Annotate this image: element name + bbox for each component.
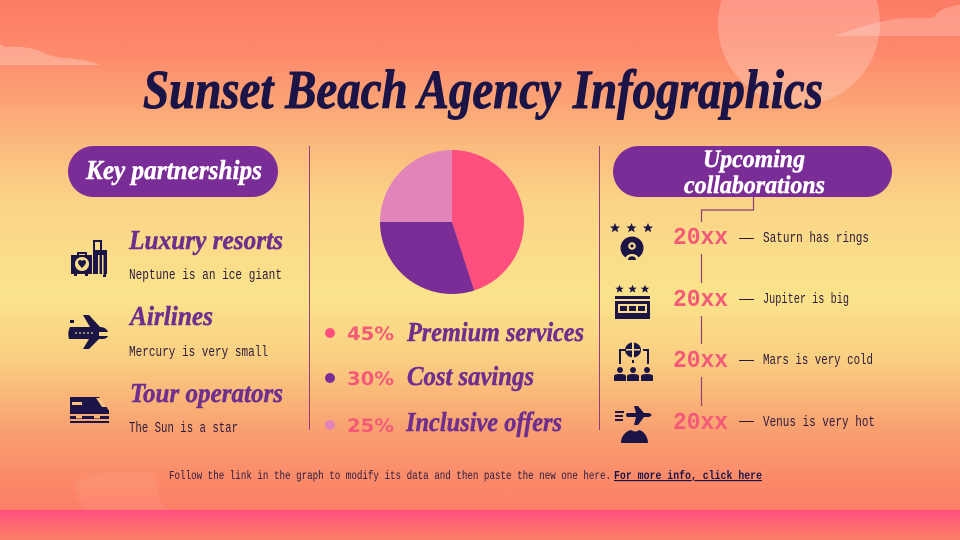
row: mars: Mars is very cold bbox=[763, 352, 873, 369]
row: jupiter bbox=[673, 287, 849, 314]
item: luxury resorts bbox=[128, 225, 283, 284]
icon: meeting group bbox=[614, 342, 653, 381]
item: tour operators: Tour operators bbox=[130, 378, 283, 408]
row: jupiter: 20xx bbox=[673, 287, 728, 314]
footer note: Follow the link in the graph to modify its data and then paste the new one here. bbox=[169, 469, 611, 483]
legend: inclusive offers: Inclusive offers bbox=[405, 407, 562, 437]
item: tour operators: The Sun is a star bbox=[129, 420, 238, 437]
legend: premium services: Premium services bbox=[406, 317, 584, 347]
footer note: For more info, click here bbox=[614, 469, 762, 483]
heading pill: key partnerships: Key partnerships bbox=[85, 155, 262, 185]
column divider right bbox=[599, 146, 600, 430]
legend: premium services: 45% bbox=[347, 323, 394, 345]
item: luxury resorts: Luxury resorts bbox=[128, 225, 283, 255]
cloud: bottom left bbox=[76, 472, 172, 510]
heading pill: upcoming collaborations: collaborations bbox=[684, 172, 825, 199]
legend: cost savings: 30% bbox=[347, 368, 394, 390]
legend: inclusive offers: 25% bbox=[347, 415, 394, 437]
icon: three stars and person bbox=[610, 223, 653, 260]
cloud: top right bbox=[835, 5, 960, 36]
item: airlines bbox=[128, 301, 268, 361]
pie chart bbox=[380, 150, 524, 294]
panel: pie chart and legend bbox=[325, 150, 584, 437]
horizon band bbox=[0, 510, 960, 540]
icon: luggage bbox=[71, 240, 107, 277]
column divider left bbox=[309, 146, 310, 430]
row: saturn: Saturn has rings bbox=[763, 230, 869, 247]
sun bbox=[718, 0, 880, 105]
item: tour operators bbox=[129, 378, 283, 437]
row: mars: 20xx bbox=[673, 348, 728, 375]
panel: upcoming collaborations bbox=[610, 146, 892, 443]
legend: premium services bbox=[325, 317, 584, 347]
row: venus: Venus is very hot bbox=[763, 414, 875, 431]
panel: key partnerships bbox=[68, 146, 283, 437]
icon: airplane bbox=[68, 315, 108, 349]
legend: cost savings bbox=[325, 361, 534, 391]
row: saturn bbox=[673, 225, 869, 252]
icon: plane over island bbox=[615, 406, 652, 443]
legend: cost savings: Cost savings bbox=[407, 361, 534, 391]
title: Sunset Beach Agency Infographics bbox=[143, 59, 823, 120]
item: luxury resorts: Neptune is an ice giant bbox=[129, 267, 282, 284]
legend: inclusive offers bbox=[325, 407, 562, 437]
cloud: top left bbox=[0, 44, 101, 65]
item: airlines: Airlines bbox=[128, 301, 213, 331]
row: jupiter: Jupiter is big bbox=[763, 291, 849, 308]
row: saturn: 20xx bbox=[673, 225, 728, 252]
item: airlines: Mercury is very small bbox=[129, 344, 268, 361]
row: venus bbox=[673, 410, 875, 437]
timeline connectors bbox=[702, 197, 754, 406]
icon: train bbox=[70, 397, 109, 423]
row: mars bbox=[673, 348, 873, 375]
row: venus: 20xx bbox=[673, 410, 728, 437]
heading pill: key partnerships bbox=[68, 146, 278, 197]
heading pill: upcoming collaborations bbox=[613, 146, 892, 199]
heading pill: upcoming collaborations: Upcoming bbox=[703, 146, 805, 173]
icon: hotel sign bbox=[615, 285, 650, 319]
